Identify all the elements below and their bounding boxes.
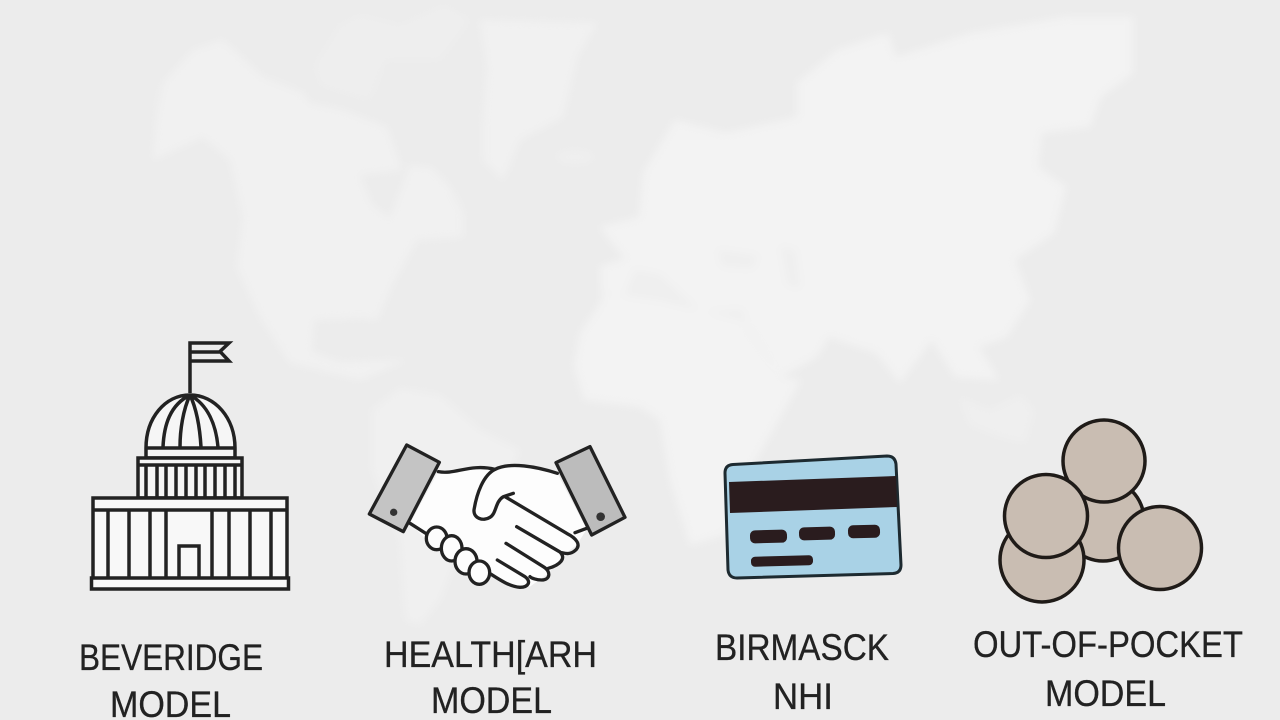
- colonnade: [138, 458, 242, 498]
- right cuff: [556, 447, 625, 535]
- map: North America: [153, 40, 463, 380]
- label: Out-of-pocket model: MODEL: [1045, 673, 1166, 714]
- door: [179, 546, 199, 578]
- knuckles: [426, 527, 447, 550]
- label: Healthcare model: [384, 634, 597, 720]
- card body: [725, 456, 901, 578]
- map: Arctic islands: [315, 5, 470, 100]
- magnetic stripe: [729, 476, 897, 513]
- map: Eurasia: [600, 17, 1133, 383]
- label: Birmasck NHI: [715, 627, 889, 717]
- flag: [190, 343, 229, 393]
- label: Out-of-pocket model: OUT-OF-POCKET: [973, 624, 1243, 665]
- map: Africa: [574, 293, 801, 545]
- hands: [410, 465, 587, 587]
- label: Birmasck NHI: NHI: [773, 676, 833, 717]
- base: [92, 578, 288, 589]
- icon: government building: [92, 343, 288, 589]
- dome: [146, 395, 235, 458]
- left cuff: [369, 445, 439, 532]
- label: Out-of-pocket model: [973, 624, 1243, 714]
- map: Greenland: [480, 20, 597, 180]
- icon: handshake: [369, 445, 625, 587]
- label: Beveridge model: [79, 637, 263, 720]
- map: inland seas: [718, 247, 800, 287]
- label: Birmasck NHI: BIRMASCK: [715, 627, 889, 668]
- label: Healthcare model: HEALTH[ARH: [384, 634, 597, 675]
- icon: stack of coins: [1000, 420, 1202, 602]
- world map watermark: [153, 5, 1133, 625]
- label: Healthcare model: MODEL: [431, 680, 552, 720]
- map: Southeast Asian islands: [959, 395, 1034, 443]
- map: South America: [372, 388, 520, 625]
- main hall: [93, 498, 287, 579]
- icon: insurance card: [725, 456, 901, 578]
- cuff buttons: [390, 509, 397, 516]
- map: Mediterranean region: [600, 250, 760, 330]
- card details: [750, 525, 880, 567]
- map: Iceland: [557, 150, 593, 164]
- label: Beveridge model: BEVERIDGE: [79, 637, 263, 678]
